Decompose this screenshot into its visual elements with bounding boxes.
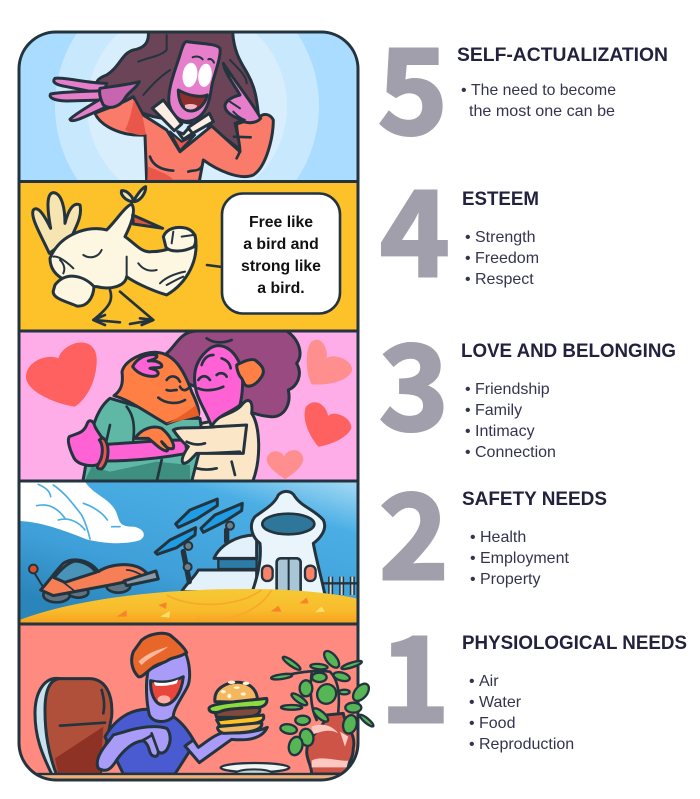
woman face xyxy=(169,42,220,121)
man hand on woman xyxy=(133,355,162,376)
thumb-up hand xyxy=(68,421,105,466)
house back xyxy=(182,535,257,592)
level 2 text: • xyxy=(470,571,476,588)
level 2 text: • xyxy=(470,529,476,546)
level 5 text: • xyxy=(461,82,467,99)
panel dividers and frame xyxy=(19,32,358,780)
bird legs xyxy=(93,290,153,325)
fence xyxy=(331,577,352,595)
level 3 text: Friendship xyxy=(475,381,550,398)
level 3 text: • xyxy=(465,423,471,440)
level 3 text: Connection xyxy=(475,444,556,461)
level 1 text: Food xyxy=(479,715,515,732)
red cuff xyxy=(97,438,108,469)
woman sweater xyxy=(194,398,260,480)
level 4 text xyxy=(462,189,539,288)
level 2 number: 2 xyxy=(379,442,449,613)
cloud xyxy=(19,482,144,543)
speech bubble xyxy=(222,194,340,314)
level 3 number: 3 xyxy=(379,293,449,464)
level 1 text xyxy=(462,633,687,753)
plate xyxy=(221,763,289,777)
level 4 text: • xyxy=(465,229,471,246)
level 1 number: 1 xyxy=(380,585,450,756)
speech bubble: a bird and xyxy=(243,236,319,253)
level 3 text: LOVE AND BELONGING xyxy=(461,341,676,362)
level 1 text: Air xyxy=(479,673,499,690)
man head xyxy=(114,352,199,424)
level 4 text: Respect xyxy=(475,271,534,288)
man jacket xyxy=(83,398,203,482)
woman right hand xyxy=(223,63,261,123)
woman eyes xyxy=(182,62,198,88)
level 3 text xyxy=(461,341,676,461)
man hand xyxy=(135,427,174,451)
level 2 text xyxy=(462,489,607,588)
panel: self-actualization woman xyxy=(20,34,356,180)
woman mouth xyxy=(178,90,207,111)
level 1 text: PHYSIOLOGICAL NEEDS xyxy=(462,633,687,654)
woman left hand xyxy=(50,78,139,121)
woman neckline xyxy=(170,132,195,151)
woman body xyxy=(95,97,273,181)
level 4 text: ESTEEM xyxy=(462,189,539,210)
level 5 text: The need to become xyxy=(471,82,616,99)
level 3 text: Family xyxy=(475,402,522,419)
level 1 text: Water xyxy=(479,694,522,711)
speech bubble tail xyxy=(207,265,222,267)
house tower xyxy=(251,491,325,595)
man arms xyxy=(97,727,170,770)
woman hair xyxy=(167,331,300,417)
level 5 text: SELF-ACTUALIZATION xyxy=(457,45,668,66)
bird wing hand xyxy=(53,276,94,306)
level 2 text: Employment xyxy=(480,550,569,567)
level 3 text: • xyxy=(465,402,471,419)
level 4 number: 4 xyxy=(380,139,450,310)
hearts xyxy=(26,340,352,479)
bird fist xyxy=(163,227,196,251)
burger xyxy=(209,681,267,733)
panel: love and belonging couple xyxy=(19,331,358,482)
speech bubble: Free like xyxy=(249,214,313,231)
solar panels xyxy=(155,499,242,582)
chair xyxy=(35,678,112,777)
bird beak xyxy=(133,215,163,228)
woman hand xyxy=(237,360,263,386)
speech bubble: strong like xyxy=(241,258,321,275)
level 5 text xyxy=(457,45,668,120)
bird body xyxy=(50,204,196,295)
ground xyxy=(19,589,358,625)
level 5 text: the most one can be xyxy=(469,103,615,120)
panel: physiological needs man xyxy=(17,625,363,781)
illustration column xyxy=(17,0,363,781)
level 1 text: • xyxy=(469,694,475,711)
table xyxy=(17,774,363,781)
level 3 text: Intimacy xyxy=(475,423,535,440)
woman collar xyxy=(152,100,213,139)
level 4 text: Strength xyxy=(475,229,535,246)
level 5 number: 5 xyxy=(378,0,448,168)
level 4 text: • xyxy=(465,271,471,288)
pink arm xyxy=(105,440,187,461)
woman sleeve xyxy=(173,425,247,463)
man hair xyxy=(132,633,187,677)
woman body shading xyxy=(125,100,173,180)
bird bow xyxy=(121,187,146,202)
woman hair xyxy=(97,32,258,151)
level 1 text: • xyxy=(469,715,475,732)
vase xyxy=(307,713,354,774)
level 2 text: Health xyxy=(480,529,526,546)
level 2 text: SAFETY NEEDS xyxy=(462,489,607,510)
panel: esteem bird xyxy=(19,182,358,331)
level 1 text: Reproduction xyxy=(479,736,574,753)
man head xyxy=(146,652,190,721)
level 4 text: Freedom xyxy=(475,250,539,267)
panel: safety needs landscape xyxy=(19,482,360,625)
speech bubble: a bird. xyxy=(257,280,305,297)
bird tail xyxy=(33,193,81,253)
level 4 text: • xyxy=(465,250,471,267)
level 1 text: • xyxy=(469,673,475,690)
plant overlapping the frame xyxy=(271,648,375,757)
woman face xyxy=(194,346,243,427)
flying car xyxy=(29,560,158,602)
level 3 text: • xyxy=(465,444,471,461)
level 3 text: • xyxy=(465,381,471,398)
level 2 text: Property xyxy=(480,571,540,588)
man shirt xyxy=(105,709,195,774)
level 2 text: • xyxy=(470,550,476,567)
level 1 text: • xyxy=(469,736,475,753)
